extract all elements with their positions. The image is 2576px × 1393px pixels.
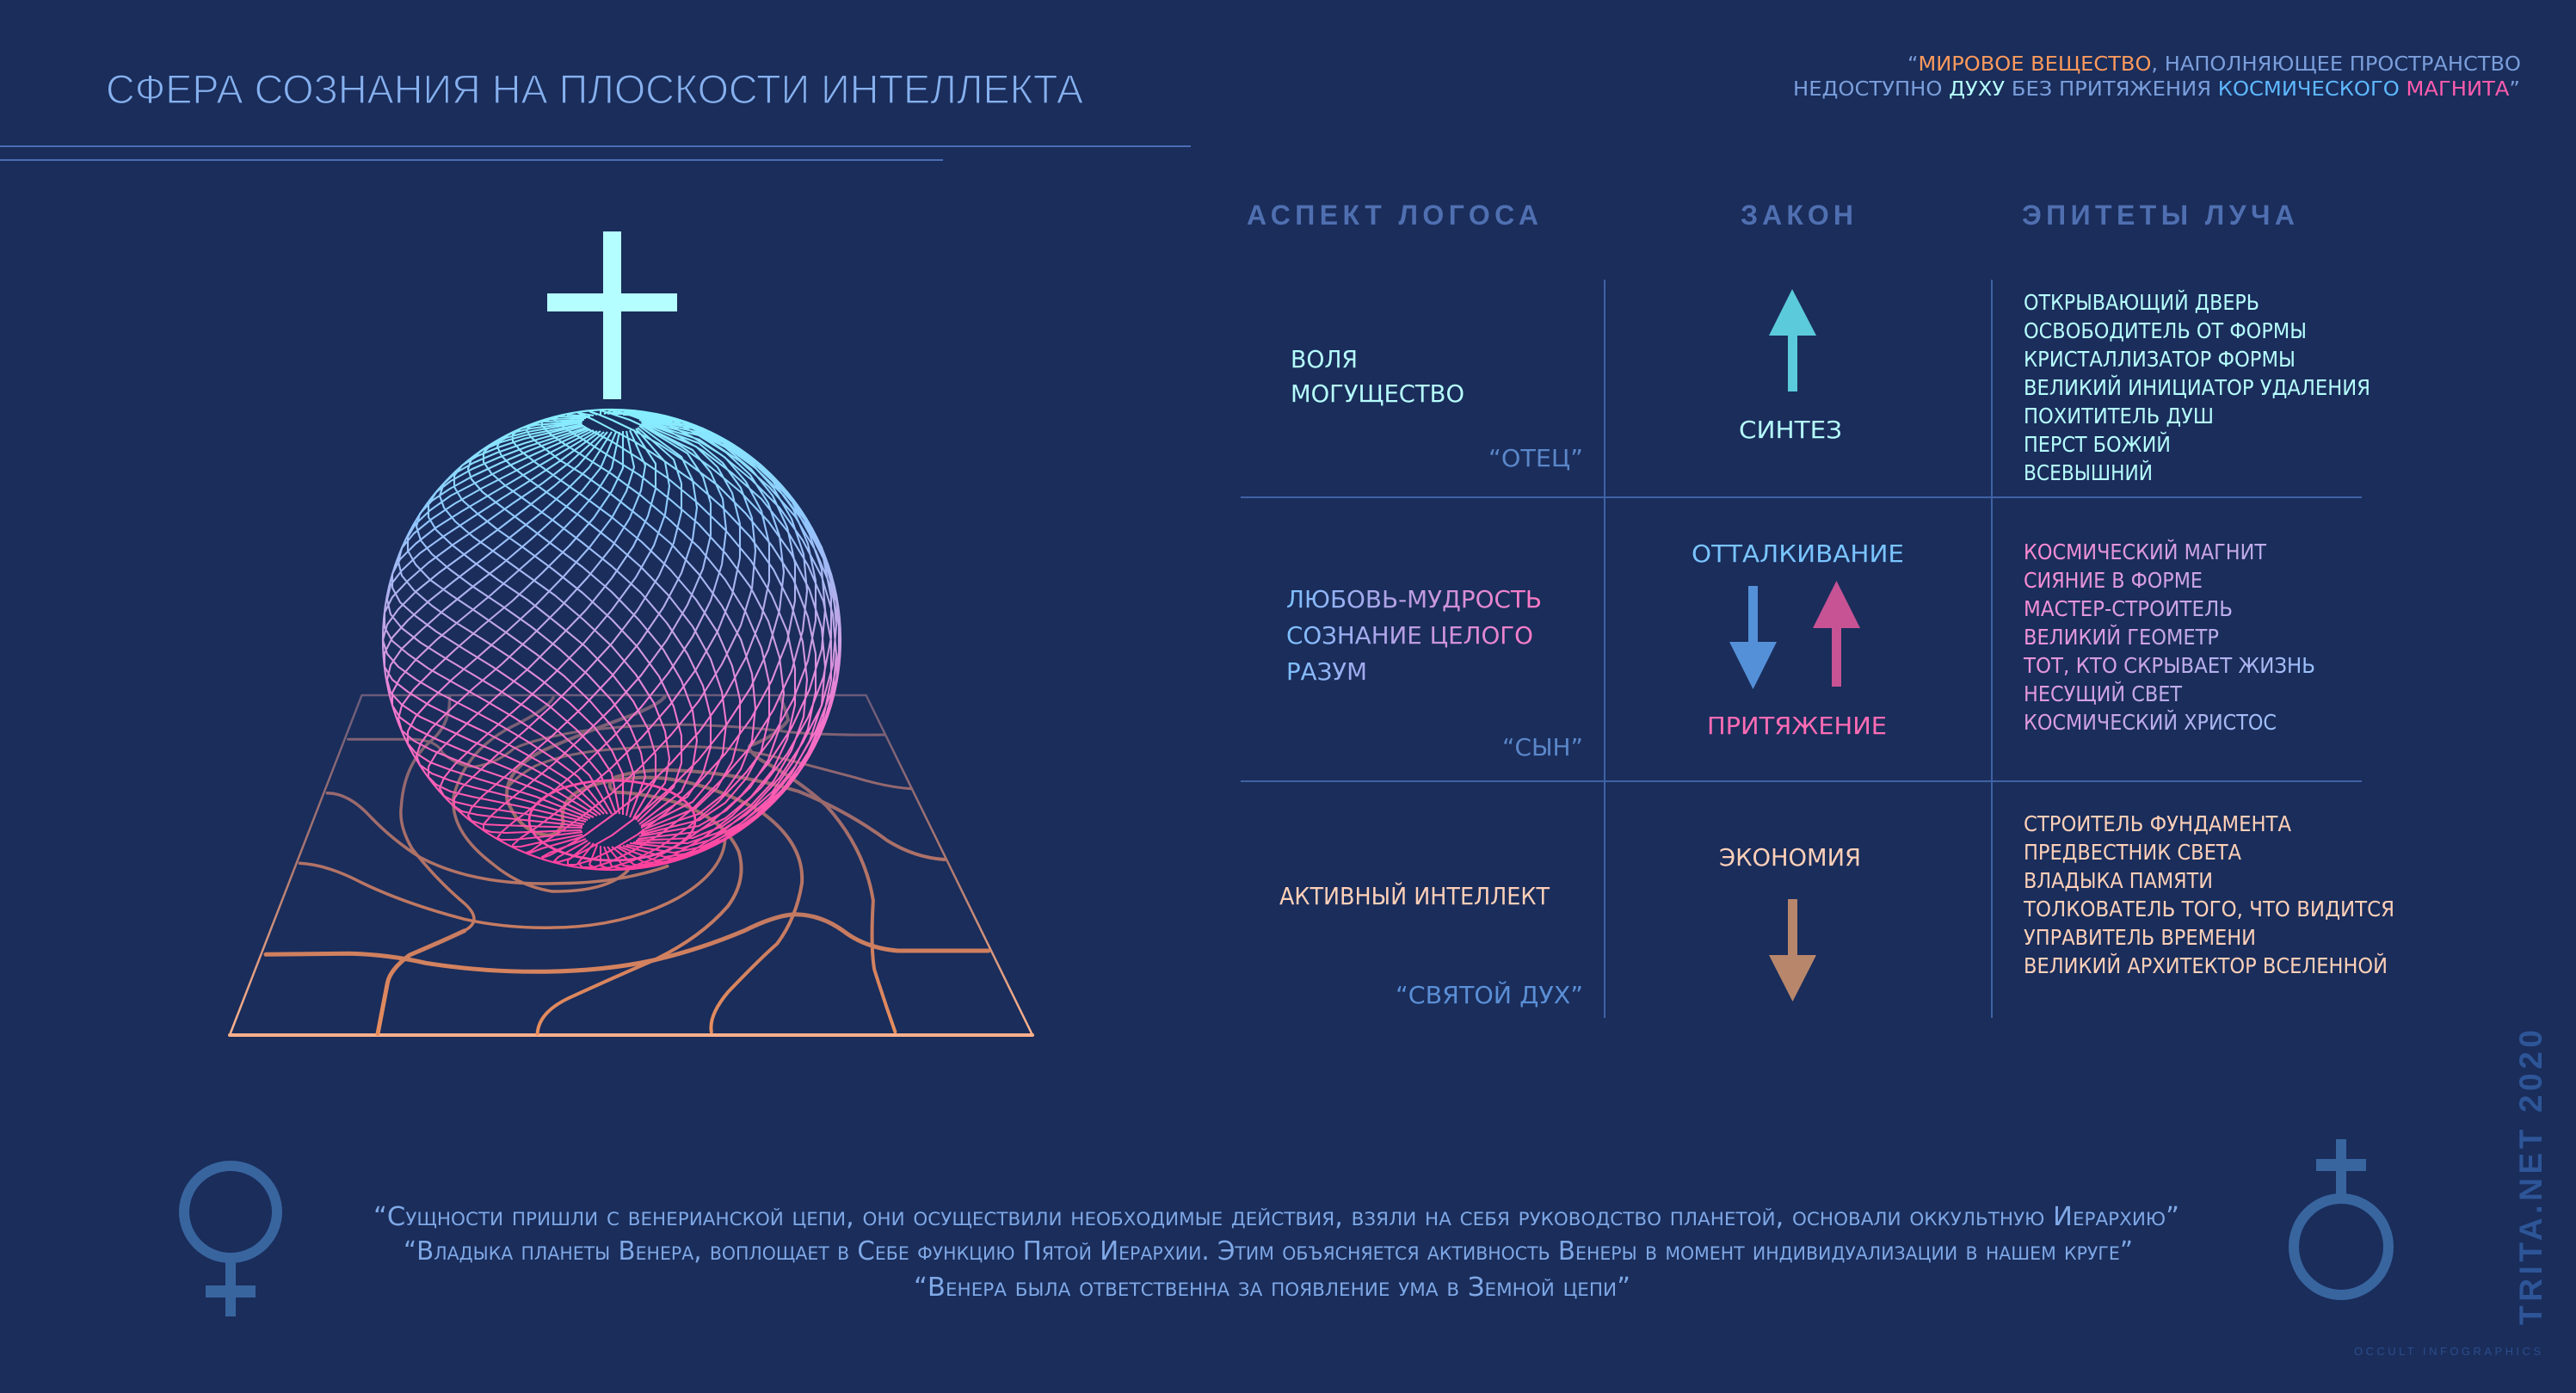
table headings: ЗАКОН xyxy=(1741,200,1853,231)
row 2: law: ПРИТЯЖЕНИЕ xyxy=(1707,712,1887,740)
row 2: epithets: КОСМИЧЕСКИЙ ХРИСТОС xyxy=(2024,710,2277,735)
plane with contour lines xyxy=(230,695,1032,1035)
row 3: epithets: ВЕЛИКИЙ АРХИТЕКТОР ВСЕЛЕННОЙ xyxy=(2024,953,2388,978)
sphere outline xyxy=(383,410,841,870)
row 1: epithets: ПЕРСТ БОЖИЙ xyxy=(2024,432,2171,457)
table xyxy=(1241,200,2394,1018)
title: СФЕРА СОЗНАНИЯ НА ПЛОСКОСТИ ИНТЕЛЛЕКТА xyxy=(106,66,1084,112)
quote line 1: “МИРОВОЕ ВЕЩЕСТВО , НАПОЛНЯЮЩЕЕ ПРОСТРАНСТВО xyxy=(1907,53,2521,76)
row 2: epithets: СИЯНИЕ В ФОРМЕ xyxy=(2024,568,2203,593)
table headings: ЭПИТЕТЫ ЛУЧА xyxy=(2022,200,2295,231)
bottom quotes: “Венера была ответственна за появление ума в Земной цепи” xyxy=(914,1273,1630,1303)
icon: repulsion arrow down xyxy=(1729,586,1777,689)
spiral wire lines xyxy=(383,410,841,870)
row 3: law: ЭКОНОМИЯ xyxy=(1719,843,1861,872)
row 1: epithets: ОСВОБОДИТЕЛЬ ОТ ФОРМЫ xyxy=(2024,318,2307,343)
row 3: epithets xyxy=(2023,811,2394,978)
row 1: aspect xyxy=(1291,345,1583,472)
icon: synthesis arrow up xyxy=(1769,289,1816,391)
row 3: epithets: УПРАВИТЕЛЬ ВРЕМЕНИ xyxy=(2024,925,2256,950)
row 1: law xyxy=(1739,289,1842,444)
top right quote xyxy=(1793,53,2521,101)
small credit: OCCULT INFOGRAPHICS xyxy=(2354,1345,2541,1358)
row 2: aspect: “СЫН” xyxy=(1502,733,1583,761)
row 3: epithets: СТРОИТЕЛЬ ФУНДАМЕНТА xyxy=(2024,811,2291,836)
row 1: epithets: ВСЕВЫШНИЙ xyxy=(2024,460,2153,485)
row 1: epithets: КРИСТАЛЛИЗАТОР ФОРМЫ xyxy=(2024,347,2296,372)
contour curves xyxy=(266,697,989,1034)
row 3: law xyxy=(1719,843,1861,1002)
row 1: epithets: ПОХИТИТЕЛЬ ДУШ xyxy=(2024,404,2214,428)
row 1: aspect: ВОЛЯ xyxy=(1291,345,1358,373)
row 3: aspect: “СВЯТОЙ ДУХ” xyxy=(1396,980,1583,1009)
row 3: epithets: ТОЛКОВАТЕЛЬ ТОГО, ЧТО ВИДИТСЯ xyxy=(2023,897,2394,921)
plane outline xyxy=(230,695,1032,1035)
wireframe sphere xyxy=(383,410,841,870)
row 2: epithets: ТОТ, КТО СКРЫВАЕТ ЖИЗНЬ xyxy=(2023,653,2315,678)
diagram: cross, sphere and plane xyxy=(230,231,1032,1035)
row 2: aspect: РАЗУМ xyxy=(1286,657,1367,686)
icon: venus symbol xyxy=(184,1166,277,1316)
cross xyxy=(547,231,677,399)
bottom quotes xyxy=(373,1202,2179,1303)
icon: economy arrow down xyxy=(1769,899,1816,1002)
icon: earth symbol xyxy=(2294,1139,2388,1295)
row 2: aspect: ЛЮБОВЬ-МУДРОСТЬ xyxy=(1286,585,1542,613)
row 2: epithets: НЕСУЩИЙ СВЕТ xyxy=(2024,681,2183,706)
row 2: aspect: СОЗНАНИЕ ЦЕЛОГО xyxy=(1286,621,1533,650)
table headings: АСПЕКТ ЛОГОСА xyxy=(1247,200,1538,231)
icon: attraction arrow up xyxy=(1813,581,1860,687)
row 2: epithets: МАСТЕР-СТРОИТЕЛЬ xyxy=(2024,596,2233,621)
lower ring xyxy=(529,780,695,860)
row 3: aspect: АКТИВНЫЙ ИНТЕЛЛЕКТ xyxy=(1279,881,1550,910)
row 1: aspect: “ОТЕЦ” xyxy=(1488,444,1583,472)
quote line 2: НЕДОСТУПНО ДУХУ БЕЗ ПРИТЯЖЕНИЯ КОСМИЧЕСКОГО МАГНИТА ” xyxy=(1793,78,2520,101)
row 1: epithets: ВЕЛИКИЙ ИНИЦИАТОР УДАЛЕНИЯ xyxy=(2024,375,2370,400)
row 1: law: СИНТЕЗ xyxy=(1739,416,1842,444)
bottom quotes: “Владыка планеты Венера, воплощает в Себе функцию Пятой Иерархии. Этим объясняется активность Венеры в момент индивидуализации в нашем круге” xyxy=(404,1236,2133,1267)
row 1: aspect: МОГУЩЕСТВО xyxy=(1291,379,1464,408)
row 2: epithets: КОСМИЧЕСКИЙ МАГНИТ xyxy=(2024,539,2267,564)
row 2: law: ОТТАЛКИВАНИЕ xyxy=(1692,539,1904,568)
row 1: epithets: ОТКРЫВАЮЩИЙ ДВЕРЬ xyxy=(2024,290,2259,315)
row 3: epithets: ПРЕДВЕСТНИК СВЕТА xyxy=(2024,840,2241,865)
row 2: aspect xyxy=(1286,585,1583,761)
row 3: epithets: ВЛАДЫКА ПАМЯТИ xyxy=(2024,868,2213,893)
row 3: aspect xyxy=(1279,881,1583,1009)
table grid xyxy=(1241,280,2362,1018)
table headings xyxy=(1247,200,2295,231)
vertical credit: TRITA.NET 2020 xyxy=(2513,1030,2548,1325)
row 2: law xyxy=(1692,539,1904,740)
row 2: epithets xyxy=(2023,539,2315,735)
row 1: epithets xyxy=(2024,290,2370,485)
bottom quotes: “Сущности пришли с венерианской цепи, они осуществили необходимые действия, взяли на себя руководство планетой, основали оккультную Иерархию” xyxy=(373,1202,2179,1232)
row 2: epithets: ВЕЛИКИЙ ГЕОМЕТР xyxy=(2024,625,2219,650)
